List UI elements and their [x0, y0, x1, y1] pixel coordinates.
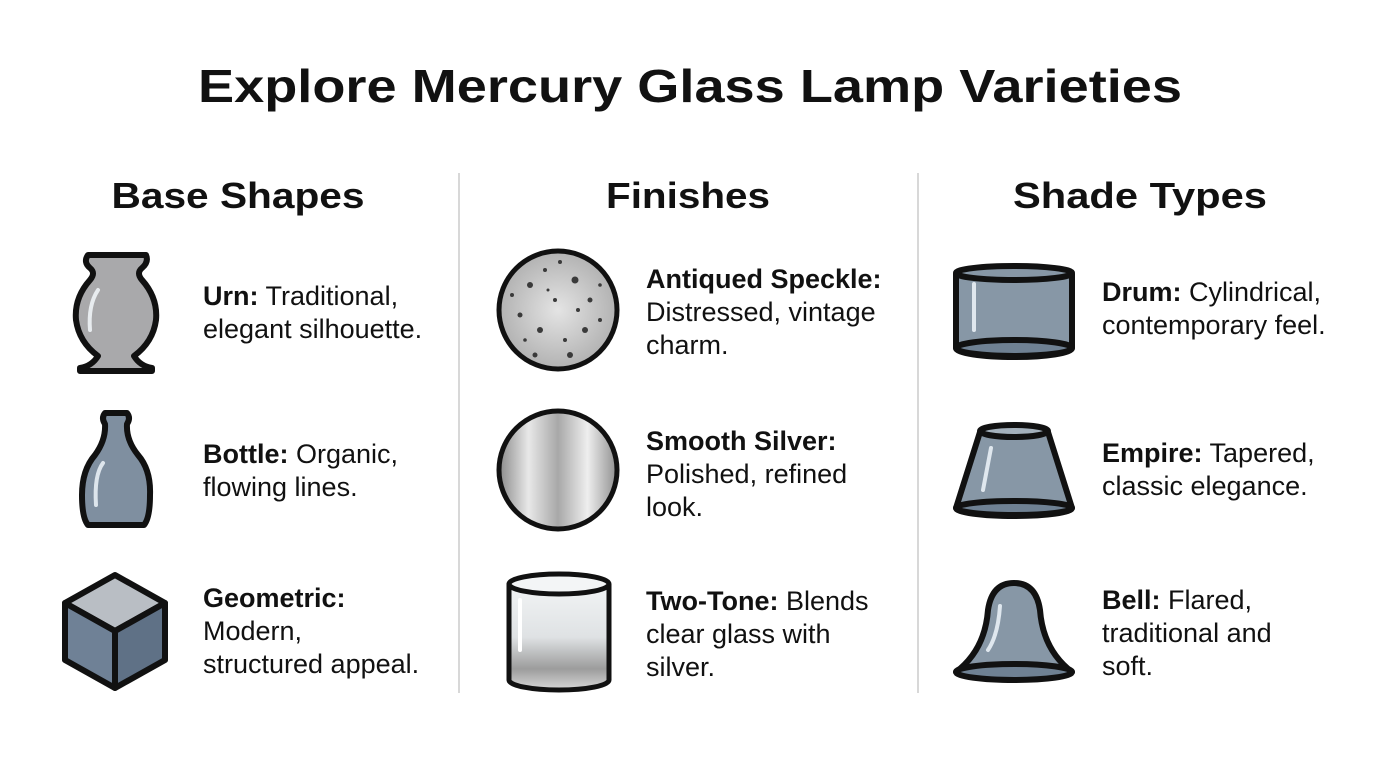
text: empire: Empire: Tapered,: [1102, 438, 1315, 468]
text: bell: Bell: Flared,: [1102, 585, 1252, 615]
text: empire: classic elegance.: [1102, 471, 1308, 501]
text: bottle: Bottle: Organic,: [203, 439, 398, 469]
icon: bell shade: [956, 583, 1072, 680]
text: two-tone: clear glass with: [646, 619, 831, 649]
icon: smooth silver: [499, 411, 617, 529]
icon: empire shade: [956, 425, 1072, 516]
heading: Finishes: Finishes: [606, 175, 770, 216]
text: antiqued speckle: charm.: [646, 330, 729, 360]
text: bottle: flowing lines.: [203, 472, 358, 502]
text: urn: Urn: Traditional,: [203, 281, 398, 311]
icon: drum shade: [956, 266, 1072, 357]
text: drum: contemporary feel.: [1102, 310, 1326, 340]
icon: two-tone cylinder: [509, 574, 609, 690]
text: bell: traditional and: [1102, 618, 1272, 648]
text: geometric: structured appeal.: [203, 649, 419, 679]
icon: antiqued speckle: [499, 251, 617, 369]
text: two-tone: silver.: [646, 652, 715, 682]
icon: bottle: [82, 413, 150, 525]
title: Explore Mercury Glass Lamp Varieties: [198, 60, 1182, 112]
text: urn: elegant silhouette.: [203, 314, 422, 344]
text: smooth silver: Smooth Silver:: [646, 426, 837, 456]
icon: urn: [76, 255, 156, 371]
text: antiqued speckle: Distressed, vintage: [646, 297, 876, 327]
text: two-tone: Two-Tone: Blends: [646, 586, 869, 616]
text: smooth silver: look.: [646, 492, 703, 522]
heading: Shade Types: Shade Types: [1013, 175, 1267, 216]
text: smooth silver: Polished, refined: [646, 459, 847, 489]
icon: cube: [65, 575, 165, 688]
text: geometric: Modern,: [203, 616, 302, 646]
text: antiqued speckle: Antiqued Speckle:: [646, 264, 882, 294]
text: geometric: Geometric:: [203, 583, 346, 613]
heading: Base Shapes: Base Shapes: [112, 175, 364, 216]
text: drum: Drum: Cylindrical,: [1102, 277, 1321, 307]
text: bell: soft.: [1102, 651, 1153, 681]
